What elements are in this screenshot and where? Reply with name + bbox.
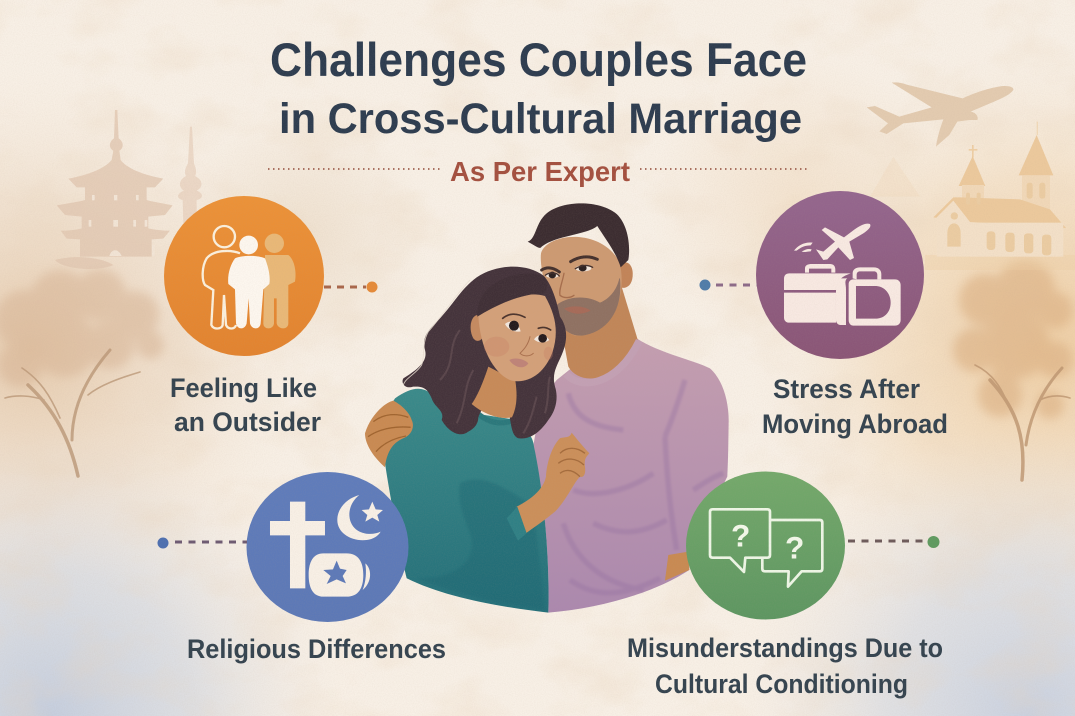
title: Challenges Couples Face — [270, 33, 807, 86]
connector — [324, 286, 366, 288]
label: Stress After — [773, 374, 920, 404]
woman: back hair — [403, 267, 566, 438]
connector dot — [158, 538, 168, 548]
icon: group of people — [203, 226, 296, 328]
icon: question speech bubbles: ? — [731, 518, 750, 554]
label — [627, 633, 943, 699]
label: an Outsider — [174, 407, 321, 437]
connector dot — [366, 282, 378, 292]
man: forearm — [665, 552, 689, 581]
man: ear — [618, 262, 633, 288]
connector — [175, 540, 247, 544]
title: in Cross-Cultural Marriage — [279, 95, 802, 143]
subtitle: as per expert: As Per Expert — [450, 156, 630, 187]
man: beard — [556, 278, 620, 336]
man: eyes — [549, 265, 587, 278]
pagoda silhouette — [55, 110, 202, 269]
label: Religious Differences — [187, 634, 446, 664]
orange circle — [164, 196, 324, 356]
man: face details — [542, 257, 597, 298]
woman: ear — [471, 315, 483, 341]
connector — [716, 284, 757, 286]
connector dot — [700, 280, 710, 290]
background trees, left — [0, 269, 164, 476]
couple illustration — [365, 203, 729, 613]
woman: face — [478, 294, 556, 381]
icon: question speech bubbles: ? — [785, 529, 804, 565]
label: Misunderstandings Due to — [627, 633, 943, 663]
icon: religious symbols — [270, 495, 383, 597]
icon: question speech bubbles — [710, 509, 822, 587]
man: mouth — [564, 306, 591, 314]
label — [170, 373, 321, 437]
woman: hair locks — [403, 280, 470, 385]
man: hair — [528, 203, 629, 267]
green circle — [686, 472, 845, 620]
panel: stress after moving abroad — [700, 191, 948, 439]
woman: neck and chest — [472, 367, 517, 418]
man: hand on shoulder — [365, 401, 413, 467]
woman: cheek blush — [484, 337, 553, 360]
connector — [848, 540, 926, 542]
panel: religious differences — [158, 472, 446, 664]
woman: lips — [509, 358, 528, 367]
man: collar — [566, 341, 639, 383]
woman: fringe — [477, 274, 547, 317]
title — [270, 33, 807, 143]
label: Cultural Conditioning — [655, 669, 908, 699]
label — [762, 374, 948, 439]
woman: sweater folds — [417, 479, 545, 610]
man: head — [541, 237, 622, 336]
panel: misunderstandings due to cultural conditioning — [627, 472, 943, 699]
woman: face details — [503, 314, 551, 356]
background trees, right — [953, 260, 1073, 480]
purple circle — [756, 191, 924, 359]
woman: collar — [475, 411, 517, 423]
airplane silhouette — [867, 82, 1013, 147]
woman: eye whites — [505, 322, 549, 342]
church silhouette — [870, 122, 1075, 270]
woman: arm and hand — [517, 433, 589, 533]
connector dot — [928, 536, 940, 548]
blue circle — [246, 472, 408, 622]
man: neck — [562, 287, 638, 379]
woman: sleeve cuff — [507, 507, 527, 541]
panel: feeling like an outsider — [164, 196, 378, 437]
label: Feeling Like — [170, 373, 317, 403]
woman: hair highlights — [440, 330, 550, 433]
man: sweater — [533, 338, 729, 613]
icon: plane and suitcases — [784, 224, 901, 326]
label: Moving Abroad — [762, 409, 948, 439]
woman: eyes — [509, 321, 547, 343]
man: eye whites — [546, 265, 591, 278]
woman: sweater — [385, 389, 549, 613]
